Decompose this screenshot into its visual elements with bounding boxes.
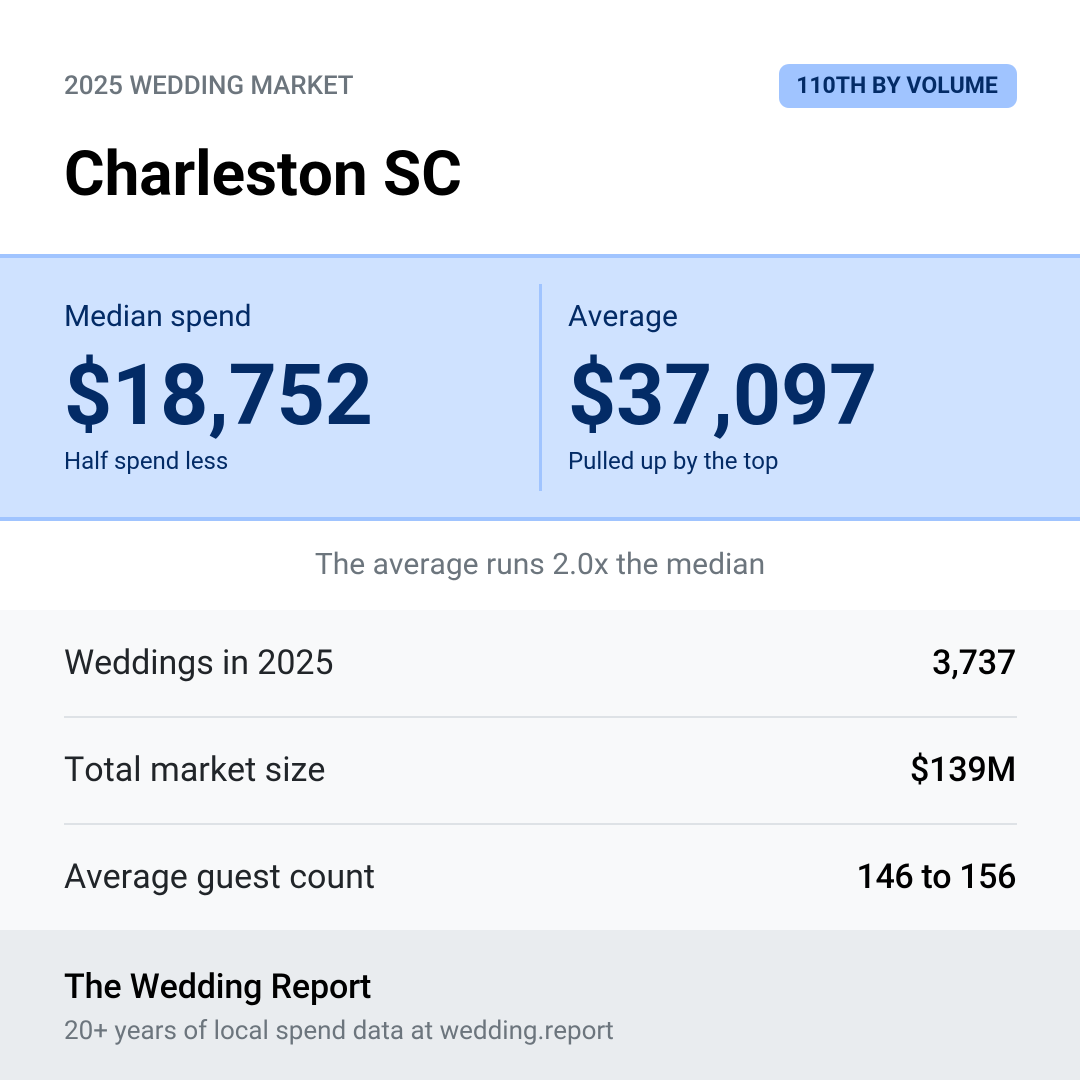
eyebrow: 2025 wedding market: 2025 WEDDING MARKET bbox=[64, 71, 353, 101]
footer brand: The Wedding Report bbox=[64, 967, 371, 1007]
footer tagline: 20+ years of local spend data at wedding.report bbox=[64, 1016, 614, 1046]
panel: spend comparison bbox=[0, 254, 1080, 521]
average label: Average bbox=[568, 299, 678, 334]
average note: Pulled up by the top bbox=[568, 447, 778, 475]
footer panel bbox=[0, 930, 1080, 1080]
badge: 110th by volume bbox=[779, 64, 1017, 108]
row label: weddings: Weddings in 2025 bbox=[64, 643, 333, 683]
row value: market size: $139M bbox=[910, 750, 1016, 790]
badge: 110th by volume: 110TH BY VOLUME bbox=[796, 72, 998, 99]
row label: guest count: Average guest count bbox=[64, 857, 375, 897]
panel: market stats bbox=[0, 610, 1080, 930]
median label: Median spend bbox=[64, 299, 251, 334]
title: Charleston SC bbox=[64, 138, 462, 211]
divider between stats bbox=[539, 284, 542, 491]
median value: $18,752 bbox=[64, 346, 373, 445]
average value: $37,097 bbox=[568, 346, 877, 445]
row value: weddings: 3,737 bbox=[932, 643, 1016, 683]
row value: guest count: 146 to 156 bbox=[857, 857, 1016, 897]
median note: Half spend less bbox=[64, 447, 228, 475]
comparison caption: The average runs 2.0x the median bbox=[315, 547, 765, 582]
row label: market size: Total market size bbox=[64, 750, 325, 790]
